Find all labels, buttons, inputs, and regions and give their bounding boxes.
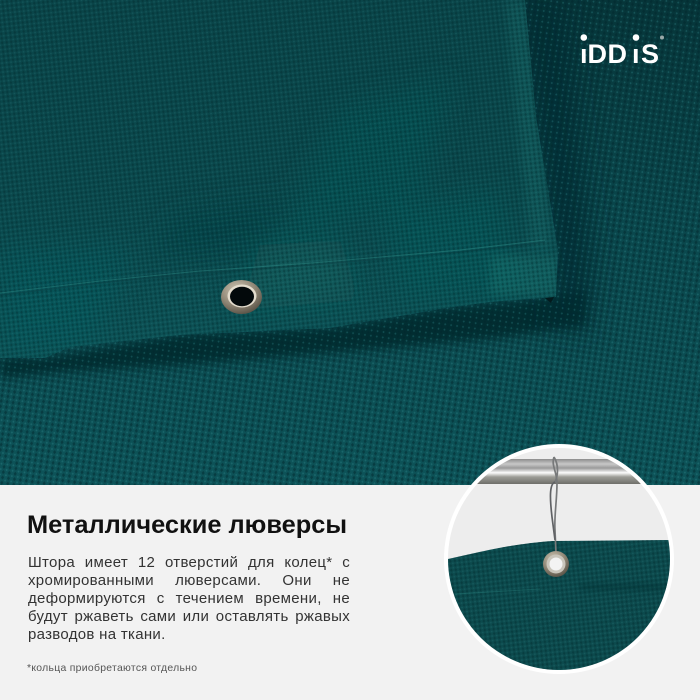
cast shadow under hem (0, 290, 585, 378)
body text: будут ржаветь сами или оставлять ржавых (28, 608, 350, 625)
shadow right of fold (525, 0, 590, 330)
body text: хромированными люверсами. Они не (28, 572, 350, 589)
ring hook (550, 457, 558, 553)
hanging curtain (448, 540, 672, 680)
chrome rod (477, 459, 641, 484)
logo: ıDDıS (580, 39, 659, 69)
body text: деформируются с течением времени, не (28, 590, 350, 607)
body text (28, 554, 350, 643)
title: Металлические люверсы (27, 511, 347, 539)
grommet on curtain (221, 280, 262, 314)
footnote: *кольца приобретаются отдельно (27, 663, 197, 674)
hem notch (545, 297, 554, 303)
hem seam (0, 240, 545, 293)
body text: разводов на ткани. (28, 626, 166, 643)
inset grommet (543, 551, 569, 577)
inset circle (444, 444, 674, 680)
front curtain panel (0, 0, 558, 358)
background fabric (0, 0, 700, 485)
light and shadow folds (260, 247, 342, 296)
body text: Штора имеет 12 отверстий для колец* с (28, 554, 350, 571)
